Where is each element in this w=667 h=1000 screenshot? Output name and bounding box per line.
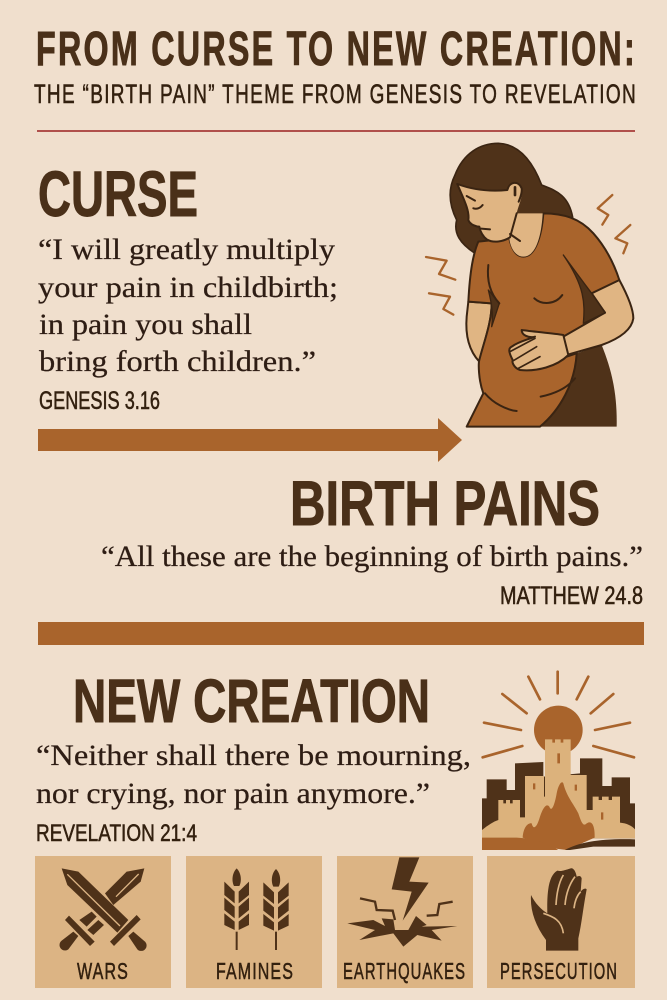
dress	[467, 213, 619, 427]
hand	[509, 330, 568, 370]
windows	[533, 753, 603, 820]
curse quote: “I will greatly multiply	[38, 233, 335, 266]
reference: revelation: REVELATION 21:4	[36, 820, 197, 847]
left arm	[466, 302, 492, 362]
icon: crossed swords	[60, 868, 147, 951]
flame	[523, 782, 595, 850]
curse quote	[38, 233, 338, 378]
heading: curse: CURSE	[38, 158, 198, 230]
reference: genesis: GENESIS 3.16	[39, 387, 160, 415]
panel: birth pains	[101, 469, 643, 610]
arrow	[38, 418, 462, 462]
label: earthquakes: EARTHQUAKES	[343, 958, 466, 984]
dark skyline	[482, 758, 635, 838]
curse quote: in pain you shall	[39, 308, 252, 341]
new creation quote: nor crying, nor pain anymore.”	[36, 777, 430, 810]
label: famines: FAMINES	[216, 958, 294, 984]
skirt shadow	[540, 345, 617, 427]
curse quote: bring forth children.”	[39, 345, 316, 378]
panel: earthquakes	[337, 856, 473, 988]
panel: persecution	[487, 856, 635, 988]
sun	[534, 706, 583, 754]
dress shadows	[488, 255, 605, 327]
sun rays	[483, 672, 634, 757]
face and neck	[457, 183, 543, 257]
birth pains quote: “All these are the beginning of birth pains.”	[101, 540, 643, 573]
pain marks	[426, 195, 630, 315]
title	[34, 23, 637, 109]
panel: new creation	[36, 667, 471, 847]
ground	[482, 838, 558, 850]
label: wars: WARS	[77, 958, 129, 984]
heading: new creation: NEW CREATION	[73, 667, 430, 735]
line work	[457, 183, 575, 411]
panel: curse	[38, 158, 338, 415]
panel: famines	[186, 856, 322, 988]
new creation quote: “Neither shall there be mourning,	[36, 739, 471, 772]
illustration: pregnant woman in pain	[426, 143, 633, 427]
new creation quote	[36, 739, 471, 810]
icon: raised hand	[531, 868, 587, 951]
light buildings	[482, 739, 635, 838]
curse quote: your pain in childbirth;	[38, 271, 338, 304]
illustration: city with rising sun	[482, 672, 635, 850]
bar	[38, 622, 644, 645]
icon: lightning and cracked ground	[347, 857, 457, 947]
panel: wars	[35, 856, 171, 988]
icon: wheat	[224, 868, 289, 950]
hair	[450, 143, 573, 253]
right arm	[560, 280, 633, 355]
